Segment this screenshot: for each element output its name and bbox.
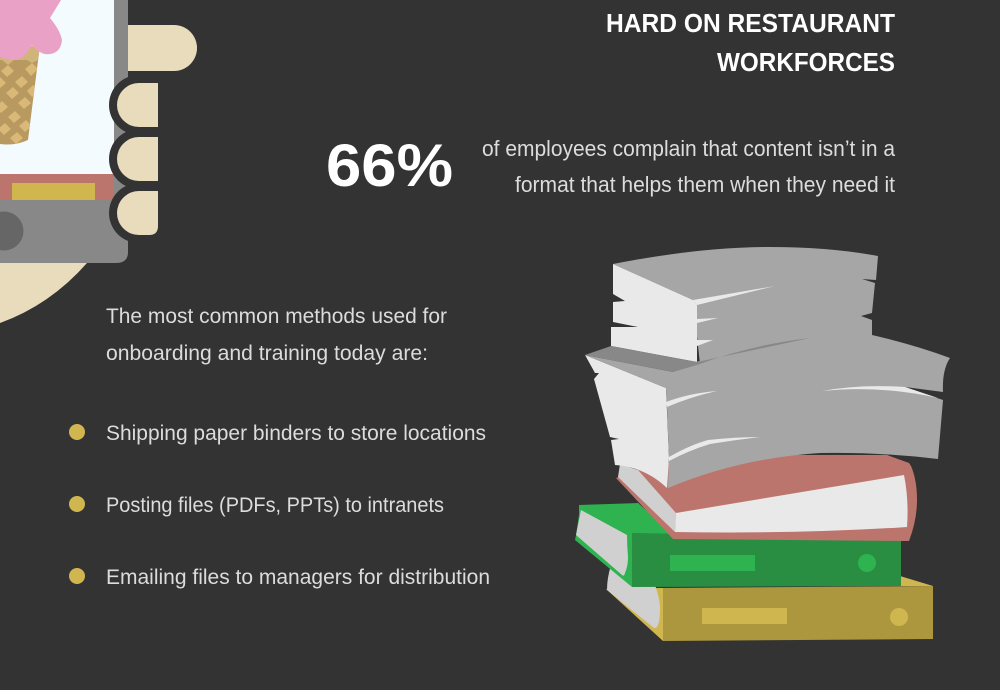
phone red band [0,174,114,201]
red book [616,455,917,541]
heading second line: WORKFORCES [717,49,895,77]
upper paper stack [585,247,878,372]
statistic description: of employees complain that content isn’t in a [482,136,896,161]
illustration: hand holding phone [0,0,197,323]
intro text: The most common methods used for [106,305,447,328]
palm [0,263,87,323]
phone grey base [0,200,114,263]
ice cream scoop [0,0,62,60]
phone yellow label [12,183,95,200]
ice cream cone [0,46,40,144]
lower paper stack [585,335,950,488]
cast shadow [585,338,810,372]
illustration: stack of books and papers [575,247,950,641]
upper paper slivers [693,286,775,305]
bullet: paper binders: Shipping paper binders to store locations [106,422,486,445]
thumb [128,25,197,71]
finger three [117,191,158,235]
finger two [117,137,158,181]
heading: HARD ON RESTAURANT [606,10,895,38]
statistic description: format that helps them when they need it [515,172,895,197]
upper paper cover [613,247,878,364]
phone body [0,0,128,263]
bullet: emailing: Emailing files to managers for distribution [106,566,490,589]
green book [575,503,901,587]
paper cover [585,335,950,488]
finger outlines [109,75,169,243]
intro text: onboarding and training today are: [106,342,428,365]
upper paper edges [611,264,697,362]
finger one [117,83,158,127]
bullet list [69,422,490,589]
paper slivers [666,391,717,407]
paper edges [585,355,669,488]
intro text [106,305,447,365]
phone home button [0,212,24,250]
bullet: intranets: Posting files (PDFs, PPTs) to intranets [106,494,444,517]
statistic: 66%: 66% [326,132,453,199]
phone screen [0,0,114,174]
yellow book [606,565,933,641]
statistic description [482,136,896,197]
